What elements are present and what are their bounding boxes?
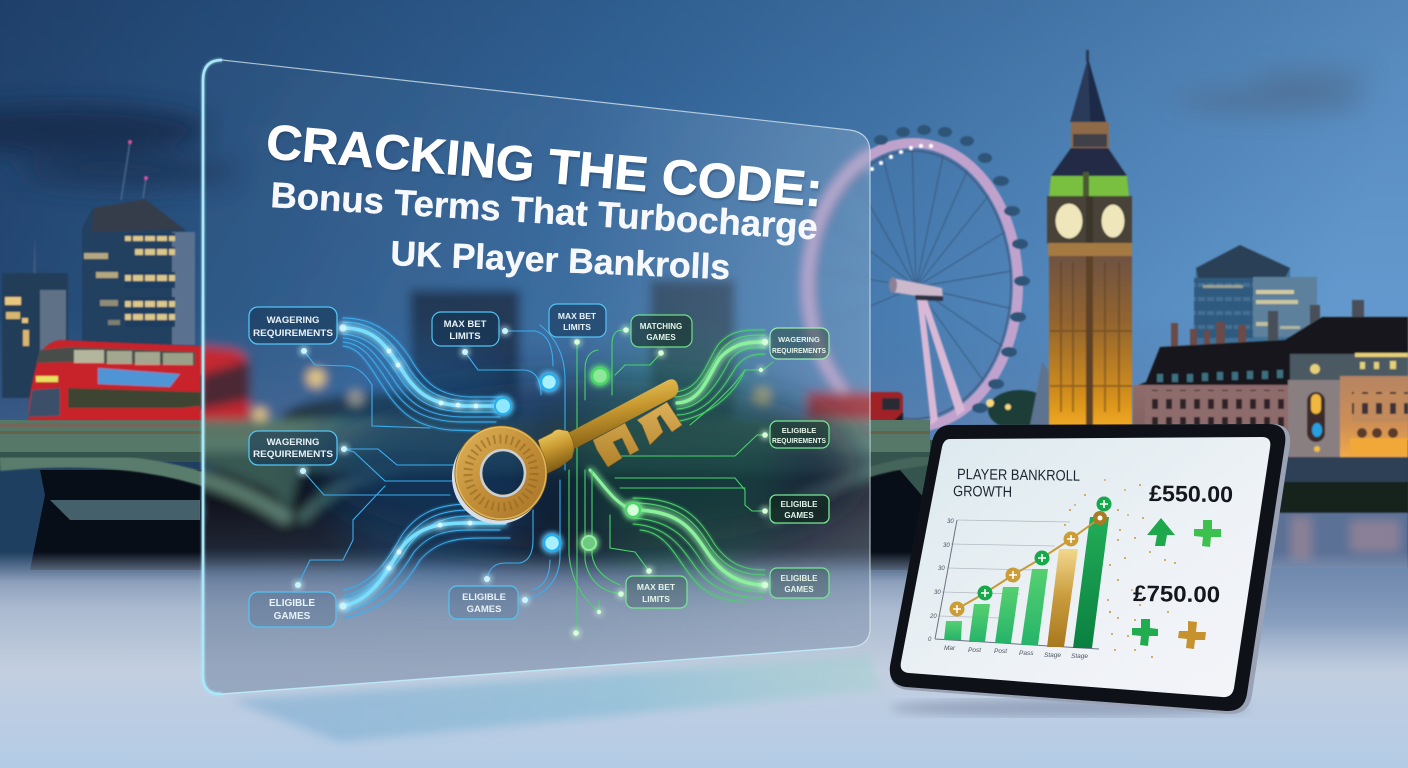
glowing left and top edge bbox=[203, 60, 222, 694]
key shaft bbox=[568, 379, 678, 449]
blue label: eligible games bbox=[249, 592, 336, 627]
tablet: player bankroll growth bbox=[890, 424, 1290, 717]
axis values: 0 bbox=[928, 637, 932, 643]
chart heading bbox=[953, 466, 1080, 501]
chart heading: GROWTH bbox=[953, 483, 1012, 501]
axis values: 30 bbox=[943, 543, 950, 549]
icon: gold plus bbox=[1178, 621, 1206, 649]
green label: eligible games lower: ELIGIBLE bbox=[781, 574, 818, 583]
value: 750 pounds: £750.00 bbox=[1133, 581, 1220, 607]
County Hall building bbox=[1133, 300, 1408, 583]
blue label: eligible games centre bbox=[449, 586, 518, 619]
engraved texture bbox=[468, 439, 534, 507]
green label: eligible requirements: REQUIREMENTS bbox=[772, 436, 826, 445]
bridge and river bbox=[0, 420, 1408, 600]
glass panel bbox=[200, 57, 871, 696]
blue label: max bet limits: MAX BET bbox=[444, 319, 487, 330]
green label: matching games: MATCHING bbox=[640, 322, 682, 331]
axis values: 20 bbox=[929, 614, 937, 620]
x axis labels: Post bbox=[968, 647, 982, 654]
blue label: wagering requirements: WAGERING bbox=[267, 315, 319, 326]
green label: wagering requirements: REQUIREMENTS bbox=[772, 346, 826, 355]
key collar bbox=[538, 429, 574, 473]
upper blue bundle bbox=[343, 318, 505, 431]
bars bbox=[944, 517, 1109, 648]
reflective floor bbox=[0, 552, 1408, 768]
dark wash and circuit glow bbox=[320, 340, 860, 580]
green label: max bet limits bbox=[626, 576, 687, 608]
green circuit traces bbox=[569, 330, 773, 633]
chart heading: PLAYER BANKROLL bbox=[957, 466, 1080, 485]
distant trees and lamps bbox=[986, 362, 1052, 430]
clouds bbox=[0, 69, 1370, 188]
green label: matching games bbox=[631, 315, 692, 347]
title line one: CRACKING THE CODE: bbox=[264, 115, 825, 218]
icon: golden key bbox=[452, 379, 682, 524]
sky bbox=[0, 0, 1408, 600]
icon: green up arrow bbox=[1147, 518, 1175, 546]
value: 550 pounds: £550.00 bbox=[1149, 481, 1233, 507]
London Eye bbox=[808, 125, 1030, 427]
lower green bundle bbox=[633, 498, 765, 602]
blue label: wagering requirements lower: REQUIREMENTS bbox=[253, 449, 333, 460]
thin blue links bbox=[298, 325, 565, 600]
x axis labels: Post bbox=[994, 648, 1008, 655]
green label: eligible games bbox=[770, 495, 829, 523]
upper green bundle bbox=[670, 330, 765, 422]
title shadow: CRACKING THE CODE: bbox=[265, 117, 826, 220]
icon: green plus bbox=[1194, 520, 1221, 547]
glass right-side sheen bbox=[203, 60, 870, 694]
green label: max bet limits: LIMITS bbox=[642, 594, 670, 604]
blue circuit traces bbox=[298, 318, 565, 618]
green label: matching games: GAMES bbox=[646, 333, 676, 342]
tablet silver edge bbox=[890, 424, 1290, 714]
axis values: 30 bbox=[934, 590, 941, 596]
blue ring nodes bbox=[295, 324, 560, 610]
blue label: wagering requirements: REQUIREMENTS bbox=[253, 328, 333, 339]
key teeth bbox=[593, 402, 682, 467]
green label: wagering requirements: WAGERING bbox=[778, 335, 820, 344]
blue label: eligible games: ELIGIBLE bbox=[269, 598, 315, 609]
gold sparkles bbox=[1064, 479, 1176, 658]
right tower block bbox=[1193, 245, 1317, 345]
key bow ring bbox=[455, 426, 547, 520]
pink water reflections bbox=[1290, 516, 1400, 561]
axis values bbox=[928, 519, 954, 643]
blue label: eligible games centre: ELIGIBLE bbox=[462, 592, 506, 603]
axis values: 30 bbox=[938, 566, 945, 572]
axis values: 30 bbox=[947, 519, 954, 525]
bar chart bbox=[928, 496, 1112, 660]
x axis labels: Stage bbox=[1071, 653, 1088, 660]
glass pane bbox=[203, 60, 870, 694]
blue label: eligible games: GAMES bbox=[274, 611, 311, 622]
x axis labels: Pass bbox=[1019, 650, 1034, 657]
green label: max bet limits: MAX BET bbox=[637, 582, 676, 592]
growth line bbox=[957, 518, 1100, 609]
title line two: Bonus Terms That Turbocharge bbox=[270, 174, 819, 247]
green label: eligible requirements bbox=[770, 421, 829, 448]
silver rim of bow bbox=[452, 430, 544, 524]
blue label: max bet limits top bbox=[549, 304, 606, 337]
thin green links bbox=[569, 330, 773, 633]
gridlines and axes bbox=[938, 520, 1070, 618]
blue label: max bet limits: LIMITS bbox=[449, 331, 481, 342]
left skyline bbox=[2, 140, 195, 398]
x axis labels bbox=[944, 645, 1088, 660]
blue label: wagering requirements lower bbox=[249, 431, 337, 465]
green label: eligible games: GAMES bbox=[784, 511, 814, 520]
x axis labels: Mar bbox=[944, 645, 956, 652]
blue label: max bet limits top: MAX BET bbox=[558, 311, 597, 321]
green ring nodes bbox=[573, 327, 768, 636]
silver inner lip bbox=[481, 450, 525, 496]
outer rim bbox=[456, 427, 546, 519]
green label: wagering requirements bbox=[770, 328, 829, 359]
red double-decker bus bbox=[28, 340, 250, 420]
second red bus behind the Eye bbox=[806, 392, 903, 432]
Big Ben tower bbox=[1047, 50, 1132, 426]
panel reflection on floor bbox=[230, 655, 880, 742]
blue label: max bet limits top: LIMITS bbox=[563, 322, 591, 332]
glowing circuit nodes bbox=[295, 324, 768, 636]
green label: eligible games lower bbox=[770, 568, 829, 598]
blurred scene behind glass bbox=[204, 142, 870, 570]
warm street lamps bbox=[253, 369, 770, 422]
blue label: wagering requirements lower: WAGERING bbox=[267, 437, 319, 448]
blue label: wagering requirements bbox=[249, 307, 337, 344]
distant blurred buildings seen through glass bbox=[280, 280, 735, 448]
green label: eligible games lower: GAMES bbox=[784, 585, 814, 594]
blue label: eligible games centre: GAMES bbox=[467, 604, 501, 615]
blue label: max bet limits bbox=[432, 312, 499, 346]
right floor blue tint bbox=[1230, 568, 1408, 678]
x axis labels: Stage bbox=[1044, 652, 1061, 659]
glowing bottom edge highlight bbox=[222, 647, 852, 694]
tablet shadow bbox=[890, 699, 1250, 717]
tablet screen bbox=[901, 437, 1270, 697]
lower blue bundle bbox=[343, 504, 510, 618]
icon: green plus lower bbox=[1132, 619, 1158, 646]
green label: eligible games: ELIGIBLE bbox=[781, 500, 818, 509]
line markers bbox=[950, 496, 1112, 616]
tablet bezel bbox=[890, 424, 1285, 711]
green label: eligible requirements: ELIGIBLE bbox=[782, 426, 816, 435]
title line three: UK Player Bankrolls bbox=[390, 234, 731, 287]
